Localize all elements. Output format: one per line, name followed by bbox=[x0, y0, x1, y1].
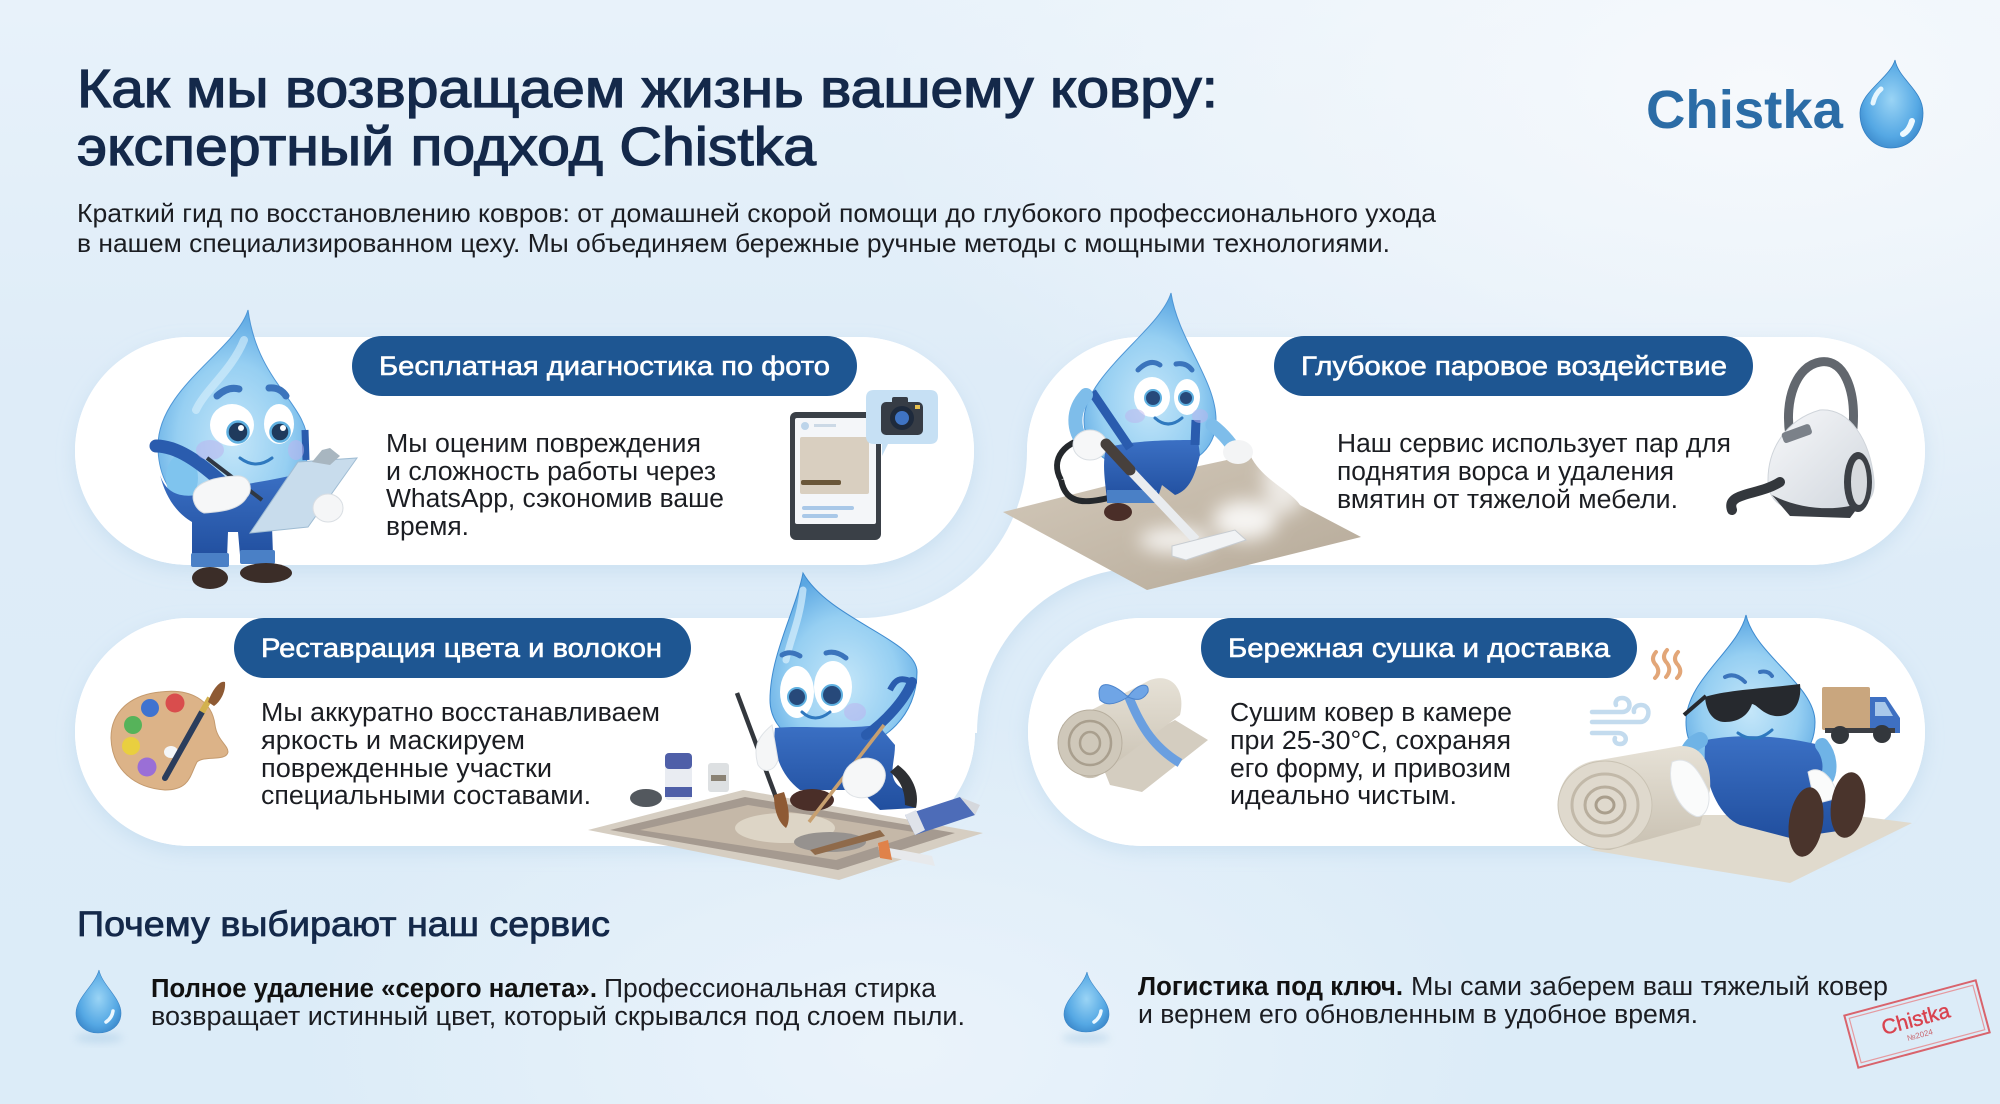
panel: deep steam treatment bbox=[1003, 293, 1925, 590]
body text: steam: вмятин от тяжелой мебели. bbox=[1337, 486, 1678, 514]
icon: delivery truck bbox=[1822, 687, 1900, 744]
body text: free diagnostics bbox=[386, 430, 724, 541]
mascot: drop steaming a carpet bbox=[1003, 293, 1361, 590]
icon: paint palette bbox=[111, 682, 228, 790]
body text: restoration: Мы аккуратно восстанавливаем bbox=[261, 699, 660, 727]
steam cloud bbox=[1139, 446, 1307, 553]
icon: tablet with carpet photo bbox=[790, 390, 938, 540]
intro text: Краткий гид по восстановлению ковров: от домашней скорой помощи до глубокого профессионального ухода bbox=[77, 198, 1437, 228]
section heading: Почему выбирают наш сервис bbox=[77, 905, 610, 944]
body text: restoration: специальными составами. bbox=[261, 782, 591, 810]
stamp: №2024 bbox=[1906, 1027, 1934, 1043]
benefit: turnkey logistics: и вернем его обновленным в удобное время. bbox=[1138, 1001, 1698, 1029]
logo bbox=[1646, 60, 1923, 148]
icon: small drop bbox=[1062, 972, 1110, 1043]
intro text: в нашем специализированном цеху. Мы объединяем бережные ручные методы с мощными технологиями. bbox=[77, 228, 1390, 258]
icon: logo water drop bbox=[1860, 60, 1923, 148]
body text: steam: Наш сервис использует пар для bbox=[1337, 430, 1731, 458]
stamp: Chistka bbox=[1879, 999, 1953, 1040]
body text: steam bbox=[1337, 430, 1731, 514]
body text: free diagnostics: время. bbox=[386, 513, 469, 541]
body text: drying: Сушим ковер в камере bbox=[1230, 699, 1512, 727]
benefit: turnkey logistics: Логистика под ключ. bbox=[1138, 973, 1403, 1001]
body text: restoration: яркость и маскируем bbox=[261, 727, 525, 755]
heading pill: restoration: Реставрация цвета и волокон bbox=[261, 633, 662, 663]
icon: heat waves bbox=[1653, 650, 1680, 678]
body text: restoration bbox=[261, 699, 660, 810]
mascot: drop restoring carpet bbox=[588, 573, 983, 880]
carpet tail bbox=[1590, 815, 1912, 883]
title: Как мы возвращаем жизнь вашему ковру: bbox=[77, 59, 1218, 119]
panel: free photo diagnostics bbox=[75, 310, 974, 589]
benefit: turnkey logistics bbox=[1062, 972, 1888, 1043]
heading pill: steam: Глубокое паровое воздействие bbox=[1301, 351, 1727, 381]
body text: drying: при 25-30°С, сохраняя bbox=[1230, 727, 1511, 755]
benefit: turnkey logistics: Мы сами заберем ваш тяжелый ковер bbox=[1411, 973, 1888, 1001]
heading pill: free diagnostics bbox=[352, 336, 857, 396]
white panel backing with S-shaped connector bbox=[75, 337, 1925, 846]
body text: free diagnostics: и сложность работы через bbox=[386, 458, 716, 486]
heading pill: drying bbox=[1201, 618, 1637, 678]
benefit: gray film removal bbox=[75, 970, 965, 1043]
title bbox=[77, 59, 1218, 177]
body text: free diagnostics: Мы оценим повреждения bbox=[386, 430, 701, 458]
patterned carpet bbox=[588, 790, 983, 880]
body text: steam: поднятия ворса и удаления bbox=[1337, 458, 1674, 486]
body text: drying bbox=[1230, 699, 1512, 810]
icon: camera bubble bbox=[866, 390, 938, 456]
icon: wind bbox=[1592, 698, 1648, 744]
panel: gentle drying and delivery bbox=[1028, 615, 1925, 883]
logo: Chistka bbox=[1646, 80, 1844, 140]
intro text bbox=[77, 198, 1437, 258]
body text: drying: его форму, и привозим bbox=[1230, 755, 1511, 783]
panel: color and fiber restoration bbox=[75, 573, 983, 880]
paint tubes bbox=[878, 797, 980, 866]
mascot: drop in sunglasses on carpet roll bbox=[1558, 615, 1912, 883]
heading pill: steam bbox=[1274, 336, 1753, 396]
paint jars and lid bbox=[630, 753, 729, 807]
heading pill: drying: Бережная сушка и доставка bbox=[1228, 633, 1611, 663]
title: экспертный подход Chistka bbox=[77, 117, 817, 177]
body text: free diagnostics: WhatsApp, сэкономив ваше bbox=[386, 485, 724, 513]
benefit: gray film removal: Полное удаление «серого налета». bbox=[151, 975, 597, 1003]
icon: rolled carpet with ribbon bbox=[1058, 678, 1208, 792]
body text: drying: идеально чистым. bbox=[1230, 782, 1457, 810]
mascot: drop with clipboard bbox=[156, 310, 357, 589]
stamp bbox=[1844, 980, 1990, 1068]
body text: restoration: поврежденные участки bbox=[261, 755, 552, 783]
benefit: gray film removal: возвращает истинный цвет, который скрывался под слоем пыли. bbox=[151, 1003, 965, 1031]
icon: small drop bbox=[75, 970, 123, 1043]
carpet under steam wand bbox=[1003, 455, 1361, 590]
heading pill: free diagnostics: Бесплатная диагностика по фото bbox=[379, 351, 830, 381]
benefit: gray film removal: Профессиональная стирка bbox=[604, 975, 937, 1003]
icon: steam cleaner bbox=[1731, 362, 1874, 518]
heading pill: restoration bbox=[234, 618, 691, 678]
